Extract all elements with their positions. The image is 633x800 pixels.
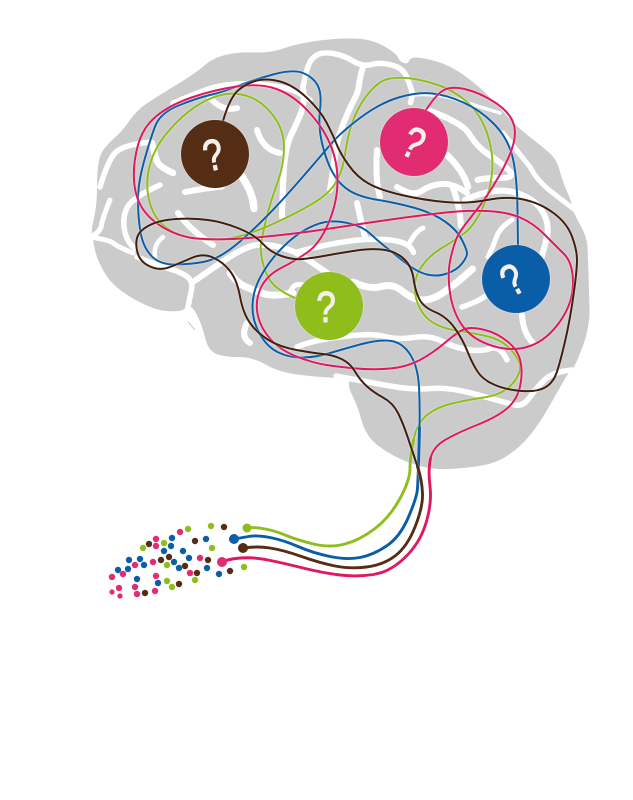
wire: pink (134, 85, 573, 576)
wire end dots (217, 524, 252, 567)
node: blue question circle (482, 245, 550, 313)
wire: blue (138, 71, 518, 559)
brain silhouette (92, 38, 590, 469)
node: green question circle (295, 272, 363, 340)
node: brown question circle (181, 120, 249, 188)
brain folds (90, 53, 575, 405)
node: brown question circle: ? (199, 130, 228, 181)
wire: green (147, 78, 520, 546)
wire: brown (136, 79, 577, 568)
scattered dots (109, 523, 247, 599)
node: pink question circle (380, 108, 448, 176)
node: green question circle: ? (316, 283, 336, 332)
node: pink question circle: ? (394, 117, 432, 170)
node: blue question circle: ? (492, 254, 533, 306)
